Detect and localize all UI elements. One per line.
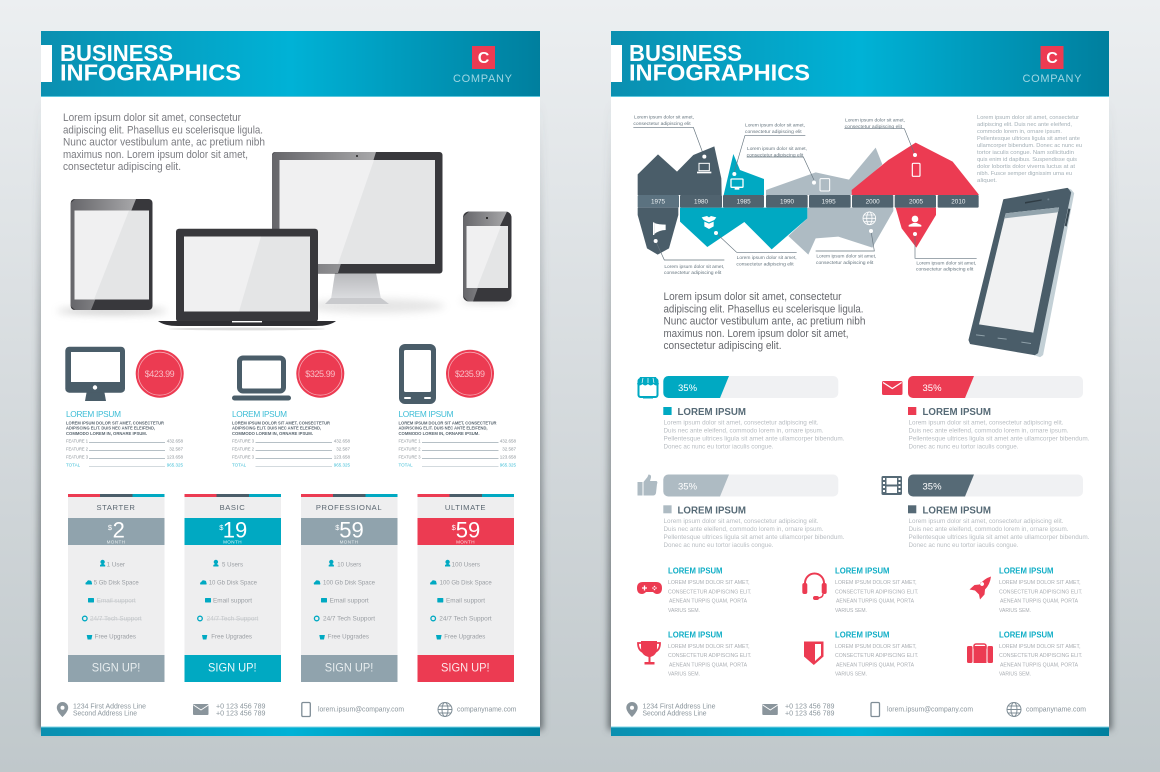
icon: globe xyxy=(1007,702,1021,716)
product text: 432.658 xyxy=(500,438,516,444)
feature text: LOREM IPSUM xyxy=(835,566,890,576)
pricing plan: starter: SIGN UP! xyxy=(92,661,140,675)
header band right xyxy=(611,31,1109,97)
intro text left xyxy=(63,112,265,173)
progress bar: 35% xyxy=(678,482,698,492)
product text: 123.658 xyxy=(334,454,350,460)
product text: LOREM IPSUM xyxy=(398,409,454,419)
product 3 xyxy=(398,344,516,468)
panel: right brochure page xyxy=(611,31,1109,736)
pricing plan: starter: 2 xyxy=(113,518,125,543)
plan features: 100 Users xyxy=(452,562,480,568)
title left: INFOGRAPHICS xyxy=(60,60,241,86)
icon: tablet xyxy=(820,179,830,191)
feature text: CONSECTETUR ADIPISCING ELIT. xyxy=(668,653,752,659)
icon: gamepad xyxy=(637,582,662,594)
product text xyxy=(66,409,183,468)
website: companyname.com xyxy=(457,706,517,714)
timeline years xyxy=(638,195,979,208)
product text: COMMODO LOREM IN, ORNARE IPSUM. xyxy=(232,431,313,436)
stat text: Donec ac nunc eu tortor iaculis congue. xyxy=(908,542,1019,549)
stat text: Duis nec ante eleifend, commodo lorem in, ornare ipsum. xyxy=(664,526,824,533)
product text: 32.587 xyxy=(502,446,516,452)
stat text: Donec ac nunc eu tortor iaculis congue. xyxy=(908,444,1019,450)
timeline captions: consectetur adipiscing elit xyxy=(664,270,722,275)
side paragraph: quis enim id dapibus. Suspendisse quis xyxy=(977,157,1077,163)
plan features xyxy=(82,560,142,640)
stat text xyxy=(908,505,1090,549)
feature text: LOREM IPSUM DOLOR SIT AMET, xyxy=(668,644,750,650)
email: lorem.ipsum@company.com xyxy=(318,706,404,714)
icon: envelope xyxy=(762,704,778,715)
timeline years: 2010 xyxy=(951,199,966,206)
feature text: LOREM IPSUM DOLOR SIT AMET, xyxy=(999,644,1080,650)
intro text left: Nunc auctor vestibulum ante, ac pretium nibh xyxy=(63,137,265,149)
product text: COMMODO LOREM IN, ORNARE IPSUM. xyxy=(398,431,480,436)
plan features: Email support xyxy=(330,598,369,604)
plan features: Email support xyxy=(97,598,136,604)
stat text: Lorem ipsum dolor sit amet, consectetur adipiscing elit. xyxy=(664,518,819,525)
stat text: Donec ac nunc eu tortor iaculis congue. xyxy=(664,542,774,549)
intro text left: Lorem ipsum dolor sit amet, consectetur xyxy=(63,112,241,124)
stat text: Pellentesque ultrices ligula sit amet ante ullamcorper bibendum. xyxy=(908,436,1090,442)
progress bar xyxy=(908,474,1083,496)
panel: left brochure page xyxy=(41,31,540,736)
pricing plan: ultimate: MONTH xyxy=(456,540,475,544)
plan features: 24/7 Tech Support xyxy=(439,616,492,622)
feature: shield xyxy=(804,629,918,678)
timeline years: 1995 xyxy=(822,199,836,206)
address: Second Address Line xyxy=(73,710,137,717)
feature text: LOREM IPSUM xyxy=(835,629,890,639)
product text: 432.658 xyxy=(167,438,183,444)
feature: gamepad xyxy=(637,566,752,614)
icon: briefcase xyxy=(967,644,993,663)
product text: 965.325 xyxy=(500,462,516,468)
side paragraph: ullamcorper bibendum. Donec ac nunc eu xyxy=(977,143,1082,149)
icon: box xyxy=(702,216,716,229)
stat text: Donec ac nunc eu tortor iaculis congue. xyxy=(664,444,774,450)
stat text: Duis nec ante eleifend, commodo lorem in, ornare ipsum. xyxy=(908,526,1069,533)
address: Second Address Line xyxy=(642,710,707,717)
logo right: COMPANY xyxy=(1022,73,1082,85)
stat text: LOREM IPSUM xyxy=(922,407,991,418)
progress bar xyxy=(663,474,838,496)
timeline captions: Lorem ipsum dolor sit amet, xyxy=(634,114,694,119)
icon: smartphone xyxy=(463,212,512,302)
title left: BUSINESS xyxy=(60,40,173,66)
side paragraph: tortor iaculis congue. Nam sollicitudin xyxy=(977,150,1074,156)
feature: briefcase xyxy=(967,629,1082,678)
plan features: Free Upgrades xyxy=(328,634,369,640)
feature text: AENEAN TURPIS QUAM, PORTA xyxy=(669,598,748,604)
timeline years: 2005 xyxy=(909,199,924,206)
timeline captions: Lorem ipsum dolor sit amet, xyxy=(737,255,797,260)
feature text: AENEAN TURPIS QUAM, PORTA xyxy=(1000,662,1079,668)
timeline captions: consectetur adipiscing elit xyxy=(845,124,903,129)
pricing plan: ultimate: $ xyxy=(452,523,457,532)
plan features: Free Upgrades xyxy=(95,634,136,640)
feature text: VARIUS SEM. xyxy=(835,672,867,678)
feature text xyxy=(668,629,752,678)
side paragraph: nibh. Fusce semper dignissim urna eu xyxy=(977,171,1072,177)
side paragraph: dolor lobortis dolor viverra luctus at at xyxy=(977,164,1075,170)
product text: FEATURE 1 xyxy=(398,438,421,444)
product text: 32.587 xyxy=(169,446,183,452)
side paragraph xyxy=(977,115,1082,184)
intro text left: adipiscing elit. Phasellus eu scelerisque ligula. xyxy=(63,124,263,136)
product text: FEATURE 3 xyxy=(398,454,421,460)
title right xyxy=(629,40,810,86)
icon: laptop xyxy=(158,229,336,330)
feature text: LOREM IPSUM xyxy=(668,629,723,639)
address: 1234 First Address Line xyxy=(642,704,716,710)
pricing plan: ultimate: ULTIMATE xyxy=(445,503,486,512)
product text: FEATURE 3 xyxy=(232,438,254,444)
email: lorem.ipsum@company.com xyxy=(887,706,973,714)
pricing plan: professional: 59 xyxy=(339,518,364,543)
product text: TOTAL xyxy=(398,462,413,468)
product text: LOREM IPSUM DOLOR SIT AMET, CONSECTETUR xyxy=(398,420,496,426)
product text: 965.325 xyxy=(167,462,183,468)
pricing plan: basic: $ xyxy=(219,523,224,532)
feature text xyxy=(835,629,918,678)
pricing plan: ultimate: SIGN UP! xyxy=(441,661,490,675)
product text: 123.658 xyxy=(500,454,516,460)
progress bar: 35% xyxy=(922,383,942,394)
side paragraph: Pellentesque ultrices ligula sit amet ante xyxy=(977,136,1080,142)
logo left: C xyxy=(478,50,490,67)
product text: FEATURE 3 xyxy=(232,454,254,460)
timeline years: 1975 xyxy=(651,199,666,206)
feature text xyxy=(999,566,1082,614)
pricing plan: ultimate xyxy=(418,494,514,682)
icon: flag xyxy=(653,222,666,235)
stat block: thumbs up xyxy=(638,474,845,549)
feature text: VARIUS SEM. xyxy=(835,608,867,614)
product text: LOREM IPSUM DOLOR SIT AMET, CONSECTETUR xyxy=(66,420,164,426)
feature: trophy xyxy=(638,629,752,678)
plan features: 5 Gb Disk Space xyxy=(94,580,139,586)
title right: BUSINESS xyxy=(629,40,742,66)
timeline captions xyxy=(633,114,976,275)
leader lines xyxy=(633,127,977,260)
feature text: VARIUS SEM. xyxy=(999,608,1031,614)
product text: TOTAL xyxy=(232,462,247,468)
stat text: Lorem ipsum dolor sit amet, consectetur adipiscing elit. xyxy=(664,420,819,426)
pricing plan: professional: SIGN UP! xyxy=(325,661,373,675)
product text: 965.325 xyxy=(334,462,350,468)
timeline captions: consectetur adipiscing elit xyxy=(633,121,691,126)
icon: phone glyph xyxy=(399,344,436,404)
footer contacts right xyxy=(626,702,1086,717)
feature text: LOREM IPSUM DOLOR SIT AMET, xyxy=(668,580,750,586)
timeline shapes xyxy=(638,143,979,255)
stat block: store xyxy=(637,376,845,450)
timeline years: 2000 xyxy=(866,199,880,206)
intro text right: adipiscing elit. Phasellus eu scelerisque ligula. xyxy=(664,303,864,315)
progress bar: 35% xyxy=(678,383,698,394)
plan features: 24/7 Tech Support xyxy=(90,616,142,622)
progress bar: 35% xyxy=(922,482,942,492)
stat text xyxy=(663,505,845,549)
icon: location pin xyxy=(57,702,68,717)
phone numbers: +0 123 456 789 xyxy=(785,704,835,710)
product text: FEATURE 1 xyxy=(66,438,88,444)
icon: phone xyxy=(871,702,880,716)
address: 1234 First Address Line xyxy=(73,704,146,710)
pricing plan: basic: MONTH xyxy=(223,540,242,544)
icon: laptop xyxy=(697,163,711,173)
plan features xyxy=(314,560,376,640)
icon: mail xyxy=(882,381,902,395)
icon: shield xyxy=(804,642,824,665)
plan features: 10 Users xyxy=(337,562,361,568)
pricing plan: starter: MONTH xyxy=(107,540,125,544)
icon: tablet xyxy=(71,199,152,310)
icon: store xyxy=(637,377,659,398)
intro text right: consectetur adipiscing elit. xyxy=(664,340,782,352)
timeline icons xyxy=(653,163,921,235)
product text: 32.587 xyxy=(336,446,350,452)
product text: ADIPISCING ELIT. DUIS NEC ANTE ELEIFEND, xyxy=(398,426,488,431)
product text: 123.658 xyxy=(167,454,183,460)
feature text: CONSECTETUR ADIPISCING ELIT. xyxy=(835,589,918,595)
phone numbers: +0 123 456 789 xyxy=(785,710,835,717)
icon: location pin xyxy=(626,702,638,717)
timeline captions: consectetur adipiscing elit xyxy=(736,261,794,266)
phone numbers: +0 123 456 789 xyxy=(216,704,266,710)
footer contacts left xyxy=(57,702,517,717)
timeline years: 1990 xyxy=(780,199,795,206)
product text: ADIPISCING ELIT. DUIS NEC ANTE ELEIFEND, xyxy=(232,426,321,431)
pricing plan: professional: $ xyxy=(335,523,340,532)
stat text xyxy=(663,407,845,450)
stat text: Pellentesque ultrices ligula sit amet ante ullamcorper bibendum. xyxy=(908,534,1090,541)
feature text xyxy=(835,566,918,614)
timeline captions: Lorem ipsum dolor sit amet, xyxy=(747,146,807,151)
feature text: LOREM IPSUM xyxy=(668,566,723,576)
pricing plan: professional: MONTH xyxy=(340,540,358,544)
stat text: Pellentesque ultrices ligula sit amet ante ullamcorper bibendum. xyxy=(664,436,845,442)
icon: thumbs up xyxy=(638,474,657,496)
feature: headset xyxy=(802,566,918,614)
title left xyxy=(60,40,241,86)
pricing plan: basic xyxy=(184,494,281,682)
pricing plan: starter: $ xyxy=(108,523,113,532)
timeline captions: consectetur adipiscing elit xyxy=(745,129,802,134)
device shadows xyxy=(57,299,513,314)
product 2 xyxy=(232,350,350,468)
pricing plan: professional: PROFESSIONAL xyxy=(316,503,382,512)
feature text: LOREM IPSUM xyxy=(999,629,1054,639)
title right: INFOGRAPHICS xyxy=(629,60,810,86)
stat text: LOREM IPSUM xyxy=(678,505,746,516)
icon: rocket xyxy=(970,576,991,600)
header band left xyxy=(41,31,540,97)
feature: rocket xyxy=(970,566,1082,614)
icon: headset xyxy=(802,574,827,600)
timeline captions: consectetur adipiscing elit xyxy=(747,152,804,157)
intro text right: Lorem ipsum dolor sit amet, consectetur xyxy=(664,291,842,303)
timeline years: 1985 xyxy=(737,199,751,206)
price badge: $423.99 xyxy=(145,369,175,379)
stat block: film xyxy=(882,474,1090,549)
stat text: LOREM IPSUM xyxy=(678,407,746,418)
logo left xyxy=(453,46,513,85)
timeline captions: Lorem ipsum dolor sit amet, xyxy=(664,264,724,269)
icon: film strip xyxy=(882,476,902,495)
pricing plan: ultimate: 59 xyxy=(456,518,480,543)
intro text left: consectetur adipiscing elit. xyxy=(63,161,181,173)
plan features: 100 Gb Disk Space xyxy=(323,580,376,586)
stat text: Lorem ipsum dolor sit amet, consectetur adipiscing elit. xyxy=(908,518,1064,525)
stat text: Duis nec ante eleifend, commodo lorem in, ornare ipsum. xyxy=(908,428,1069,434)
product 1 xyxy=(65,347,184,468)
stat text: Lorem ipsum dolor sit amet, consectetur adipiscing elit. xyxy=(908,420,1064,426)
timeline chart xyxy=(633,114,979,275)
feature text: CONSECTETUR ADIPISCING ELIT. xyxy=(999,653,1082,659)
icon: envelope xyxy=(193,704,208,715)
product text xyxy=(398,409,516,468)
side paragraph: Lorem ipsum dolor sit amet, consectetur xyxy=(977,115,1079,121)
pricing plan: basic: 19 xyxy=(223,518,247,543)
icon: phone xyxy=(912,163,920,176)
address xyxy=(73,704,146,717)
pricing plan: starter: STARTER xyxy=(97,503,135,512)
side paragraph: aliquet. xyxy=(977,178,997,184)
feature text: AENEAN TURPIS QUAM, PORTA xyxy=(836,598,915,604)
logo left: COMPANY xyxy=(453,73,513,85)
icon: large smartphone xyxy=(969,189,1074,357)
feature text: LOREM IPSUM DOLOR SIT AMET, xyxy=(835,580,916,586)
plan features xyxy=(430,560,492,640)
icon: desktop monitor xyxy=(272,152,442,304)
timeline captions: Lorem ipsum dolor sit amet, xyxy=(745,123,805,128)
feature text: CONSECTETUR ADIPISCING ELIT. xyxy=(668,589,752,595)
progress bar xyxy=(908,376,1083,398)
feature text: LOREM IPSUM xyxy=(999,566,1054,576)
timeline captions: consectetur adipiscing elit xyxy=(816,260,874,265)
plan features: 1 User xyxy=(107,562,125,568)
product text: LOREM IPSUM xyxy=(232,409,287,419)
timeline dots xyxy=(654,153,917,243)
intro text right xyxy=(664,291,866,352)
feature text: VARIUS SEM. xyxy=(668,608,700,614)
plan features xyxy=(198,560,259,640)
logo right: C xyxy=(1046,50,1058,67)
feature text: LOREM IPSUM DOLOR SIT AMET, xyxy=(999,580,1080,586)
logo right xyxy=(1022,46,1082,85)
stat text: Duis nec ante eleifend, commodo lorem in, ornare ipsum. xyxy=(664,428,824,434)
product text: FEATURE 2 xyxy=(398,446,421,452)
feature text: AENEAN TURPIS QUAM, PORTA xyxy=(669,662,748,668)
plan features: 10 Gb Disk Space xyxy=(209,580,258,586)
feature text xyxy=(668,566,752,614)
plan features: Email support xyxy=(213,598,252,604)
stat text xyxy=(908,407,1090,450)
phone numbers xyxy=(785,704,835,717)
icon: globe xyxy=(863,212,876,225)
icon: phone xyxy=(302,702,310,716)
intro text right: Nunc auctor vestibulum ante, ac pretium nibh xyxy=(664,316,866,328)
feature text: AENEAN TURPIS QUAM, PORTA xyxy=(836,662,915,668)
side paragraph: adipiscing elit. Duis nec ante eleifend, xyxy=(977,122,1072,128)
product text: FEATURE 3 xyxy=(66,454,88,460)
intro text right: maximus non. Lorem ipsum dolor sit amet, xyxy=(664,328,848,340)
footer band left xyxy=(41,726,540,736)
pricing plan: basic: BASIC xyxy=(220,503,245,512)
feature text: CONSECTETUR ADIPISCING ELIT. xyxy=(835,653,918,659)
feature text: AENEAN TURPIS QUAM, PORTA xyxy=(1000,598,1079,604)
address xyxy=(642,704,716,717)
feature text: CONSECTETUR ADIPISCING ELIT. xyxy=(999,589,1082,595)
product text: TOTAL xyxy=(66,462,81,468)
icon: trophy xyxy=(638,641,660,664)
icon: monitor xyxy=(731,179,743,190)
icon: person xyxy=(909,216,921,227)
stat block: mail xyxy=(882,376,1090,450)
plan features: 5 Users xyxy=(222,562,243,568)
product text: FEATURE 2 xyxy=(66,446,88,452)
timeline captions: Lorem ipsum dolor sit amet, xyxy=(916,261,976,266)
plan features: 24/7 Tech Support xyxy=(323,616,375,622)
website: companyname.com xyxy=(1026,706,1086,714)
plan features: Free Upgrades xyxy=(444,634,485,640)
timeline years: 1980 xyxy=(694,199,709,206)
icon: laptop glyph xyxy=(232,358,291,400)
product text: LOREM IPSUM DOLOR SIT AMET, CONSECTETUR xyxy=(232,420,330,426)
timeline captions: consectetur adipiscing elit xyxy=(916,267,974,272)
progress bar xyxy=(663,376,838,398)
product text: COMMODO LOREM IN, ORNARE IPSUM. xyxy=(66,431,147,436)
price badge: $325.99 xyxy=(305,369,335,379)
product text xyxy=(232,409,350,468)
feature text: VARIUS SEM. xyxy=(999,672,1031,678)
stat text: LOREM IPSUM xyxy=(922,505,991,516)
product text: 432.658 xyxy=(334,438,350,444)
pricing plan: professional xyxy=(301,494,398,682)
product text: LOREM IPSUM xyxy=(66,409,121,419)
icon: monitor xyxy=(65,347,125,401)
plan features: Email support xyxy=(446,598,485,604)
feature text: VARIUS SEM. xyxy=(668,672,700,678)
timeline captions: Lorem ipsum dolor sit amet, xyxy=(845,118,905,123)
icon: globe xyxy=(438,702,452,716)
phone numbers xyxy=(216,704,266,717)
feature text: LOREM IPSUM DOLOR SIT AMET, xyxy=(835,644,916,650)
plan features: Free Upgrades xyxy=(211,634,252,640)
plan features: 100 Gb Disk Space xyxy=(440,580,492,586)
pricing plan: basic: SIGN UP! xyxy=(208,661,257,675)
product text: FEATURE 2 xyxy=(232,446,254,452)
phone numbers: +0 123 456 789 xyxy=(216,710,266,717)
timeline captions: Lorem ipsum dolor sit amet, xyxy=(816,254,876,259)
intro text left: maximus non. Lorem ipsum dolor sit amet, xyxy=(63,149,248,161)
stat text: Pellentesque ultrices ligula sit amet ante ullamcorper bibendum. xyxy=(664,534,845,541)
footer band right xyxy=(611,726,1109,736)
side paragraph: commodo lorem in, ornare ipsum. xyxy=(977,129,1062,135)
feature text xyxy=(999,629,1082,678)
product text: ADIPISCING ELIT. DUIS NEC ANTE ELEIFEND, xyxy=(66,426,155,431)
pricing plan: starter xyxy=(68,494,164,682)
plan features: 24/7 Tech Support xyxy=(207,616,259,622)
price badge: $235.99 xyxy=(455,369,485,379)
